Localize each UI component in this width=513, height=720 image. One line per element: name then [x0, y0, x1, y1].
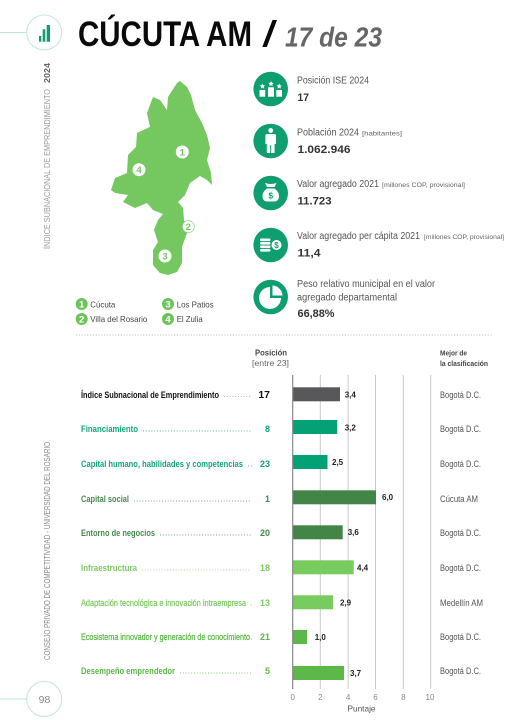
- map of metropolitan area: [111, 81, 212, 275]
- row: Capital humano: 23: [260, 459, 270, 469]
- bar values: 2,5: [332, 458, 344, 467]
- stat: added value: [253, 176, 465, 210]
- x axis ticks: 0: [290, 693, 295, 702]
- row: Capital humano: Capital humano, habilidades y competencias: [81, 459, 243, 469]
- map badge 4: [132, 163, 146, 176]
- map badge 2: 2: [186, 222, 191, 233]
- stat: position: [253, 72, 369, 106]
- stat: population: 1.062.946: [298, 144, 350, 156]
- best ranked column: Bogotá D.C.: [440, 666, 481, 676]
- map legend: Cúcuta: [90, 300, 116, 310]
- row: Capital social: Capital social: [81, 494, 129, 504]
- bar values: 3,4: [345, 390, 356, 400]
- row: Financiamiento: 8: [265, 424, 270, 434]
- stat: municipal weight: Peso relativo municipal en el valor: [297, 279, 436, 290]
- stat: added value: Valor agregado 2021: [297, 179, 379, 190]
- bar values: 3,6: [348, 528, 359, 537]
- icon: top chart badge: [0, 15, 62, 50]
- map legend: Villa del Rosario: [90, 314, 148, 324]
- best ranked column: [440, 390, 483, 676]
- row: Índice Subnacional de Emprendimiento: 17: [258, 389, 270, 401]
- icon: coins: [253, 228, 288, 262]
- column header: position: [entre 23]: [252, 358, 289, 368]
- bar values: 4,4: [357, 564, 369, 572]
- stat: municipal weight: 66,88%: [298, 308, 335, 320]
- icon: podium with stars: [253, 72, 288, 106]
- icon: money bag: $: [268, 190, 273, 200]
- stat: added value: [millones COP, provisional]: [382, 182, 465, 189]
- stat: position: Posición ISE 2024: [297, 76, 369, 86]
- best ranked column: Bogotá D.C.: [440, 632, 481, 642]
- row: Desempeño emprendedor: Desempeño emprendedor: [81, 666, 175, 676]
- title: [78, 14, 382, 54]
- x axis title: Puntaje: [348, 704, 376, 714]
- column header: best ranked: la clasificación: [440, 359, 488, 368]
- bars: [293, 387, 376, 680]
- row: Adaptación tecnológica: 13: [260, 598, 270, 608]
- map legend: [76, 298, 214, 326]
- row: Ecosistema innovador: Ecosistema innovador y generación de conocimiento: [81, 632, 250, 642]
- row: Ecosistema innovador: 21: [260, 632, 270, 642]
- best ranked column: Bogotá D.C.: [440, 563, 481, 573]
- map badge 3: 3: [162, 252, 168, 262]
- map legend: 1: [79, 300, 85, 310]
- row: Adaptación tecnológica: Adaptación tecnológica e innovación intraempresa: [81, 598, 246, 608]
- map legend: 2: [79, 314, 84, 326]
- row: Infraestructura: Infraestructura: [81, 563, 137, 573]
- icon: person: [253, 124, 288, 158]
- map badge 1: [176, 146, 189, 158]
- bar values: 3,7: [350, 669, 362, 678]
- icon: money bag: [253, 176, 288, 210]
- x axis ticks: 4: [346, 693, 351, 702]
- map legend: 4: [165, 314, 171, 326]
- best ranked column: Medellín AM: [440, 598, 483, 608]
- stat: added value per capita: Valor agregado per cápita 2021: [297, 231, 420, 242]
- bar values: 6,0: [382, 493, 394, 502]
- title: 17 de 23: [285, 22, 382, 52]
- stat: population: [253, 124, 402, 158]
- bar values: 1,0: [315, 633, 326, 642]
- row: Financiamiento: Financiamiento: [81, 424, 139, 434]
- column header: position: Posición: [255, 348, 287, 358]
- stat: added value per capita: [millones COP, provisional]: [424, 234, 504, 241]
- row: Índice Subnacional de Emprendimiento: Índice Subnacional de Emprendimiento: [81, 390, 220, 400]
- x axis ticks: [290, 693, 435, 702]
- side label: index and year: 2024: [42, 63, 52, 83]
- page number badge: [0, 682, 62, 716]
- page number badge: 98: [39, 694, 50, 706]
- best ranked column: Bogotá D.C.: [440, 390, 481, 400]
- stat: municipal weight: [253, 279, 436, 320]
- best ranked column: Bogotá D.C.: [440, 424, 481, 434]
- stat: population: [habitantes]: [362, 130, 402, 138]
- side label: index and year: ÍNDICE SUBNACIONAL DE EMPRENDIMIENTO: [42, 89, 52, 249]
- map badge 2: [182, 221, 194, 233]
- icon: coins: $: [274, 241, 279, 250]
- row: Financiamiento: [81, 424, 270, 434]
- map legend: 3: [165, 300, 171, 310]
- x axis ticks: 8: [401, 693, 406, 702]
- best ranked column: Bogotá D.C.: [440, 459, 481, 469]
- stat: added value per capita: 11,4: [298, 248, 321, 260]
- icon: pie chart: [253, 280, 288, 314]
- map legend: El Zulia: [177, 314, 203, 324]
- bar values: 2,9: [340, 598, 352, 608]
- row: Entorno de negocios: [81, 528, 270, 538]
- column header: position: [252, 348, 289, 368]
- row: Infraestructura: [81, 563, 270, 573]
- stat: added value per capita: [253, 228, 504, 262]
- row: Capital social: [81, 494, 270, 504]
- column header: best ranked: Mejor de: [440, 349, 467, 358]
- column header: best ranked: [440, 349, 488, 368]
- row: Desempeño emprendedor: [81, 666, 270, 676]
- best ranked column: Bogotá D.C.: [440, 528, 481, 538]
- map legend: Los Patios: [177, 300, 214, 310]
- row: Desempeño emprendedor: 5: [265, 666, 270, 676]
- row labels and positions: [81, 389, 270, 676]
- title: CÚCUTA AM: [78, 14, 252, 54]
- side label: publishers: CONSEJO PRIVADO DE COMPETITIVIDAD - UNIVERSIDAD DEL ROSARIO: [42, 442, 52, 660]
- bar values: [315, 390, 394, 678]
- bar chart: [290, 375, 435, 714]
- x axis ticks: 10: [426, 693, 435, 702]
- map badge 1: 1: [180, 148, 186, 158]
- row: Entorno de negocios: 20: [260, 528, 270, 538]
- stat: population: Población 2024: [297, 128, 360, 138]
- stat: position: 17: [298, 92, 309, 104]
- best ranked column: Cúcuta AM: [440, 494, 478, 504]
- row: Infraestructura: 18: [260, 563, 270, 573]
- row: Entorno de negocios: Entorno de negocios: [81, 528, 155, 538]
- stat: municipal weight: agregado departamental: [297, 292, 397, 304]
- x axis ticks: 2: [318, 693, 323, 702]
- title slash: [262, 20, 277, 47]
- row: Capital social: 1: [265, 494, 270, 504]
- x axis ticks: 6: [373, 693, 378, 702]
- stat: added value: 11.723: [298, 196, 332, 208]
- bar values: 3,2: [345, 424, 356, 432]
- map badge 3: [158, 250, 172, 262]
- map badge 4: 4: [136, 165, 142, 176]
